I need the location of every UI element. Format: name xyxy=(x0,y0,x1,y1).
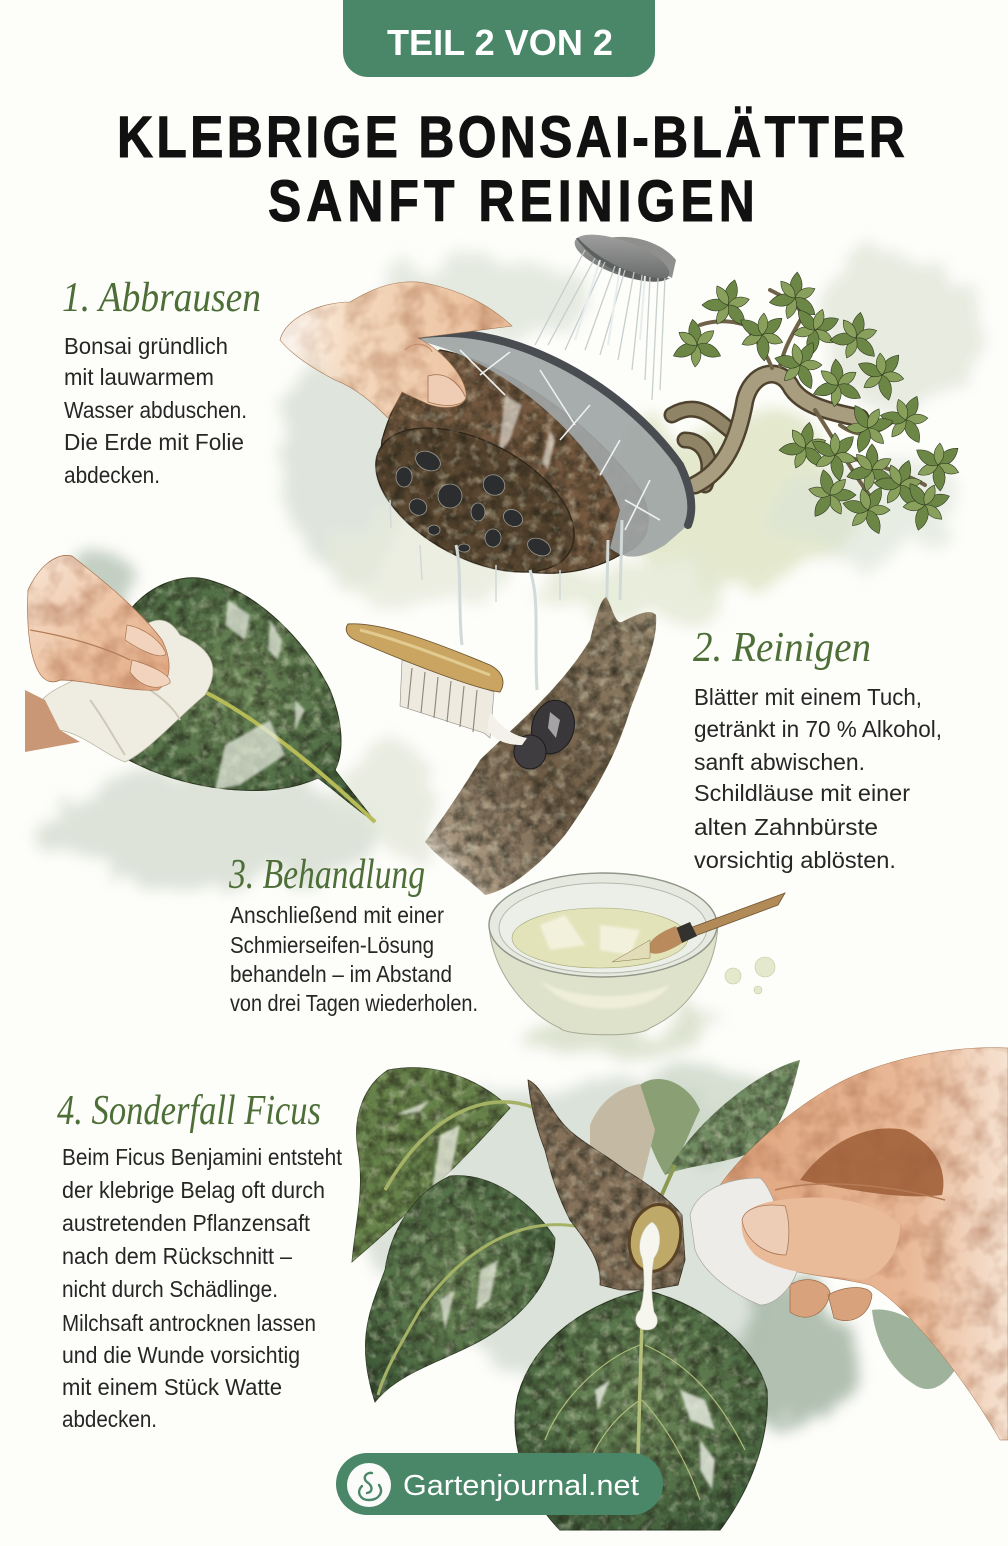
top tab: part label xyxy=(343,0,655,77)
bonsai tree xyxy=(671,266,974,544)
bark branch with cut xyxy=(528,1080,688,1290)
icon: sprout logo xyxy=(347,1463,391,1507)
text block: step 4: Beim Ficus Benjamini entsteht xyxy=(62,1144,343,1170)
heading: step 2: 2. Reinigen xyxy=(693,625,871,671)
text block: step 4: der klebrige Belag oft durch xyxy=(62,1177,325,1203)
cotton wad xyxy=(690,1178,797,1305)
terracotta pot with holes xyxy=(352,350,648,602)
plastic film over soil xyxy=(412,332,691,557)
text block: step 4 xyxy=(62,1144,343,1432)
text block: step 4: mit einem Stück Watte xyxy=(62,1374,282,1400)
footer badge: Gartenjournal.net xyxy=(336,1453,663,1515)
rear leaves xyxy=(640,1060,955,1389)
text block: step 4: nach dem Rückschnitt – xyxy=(62,1243,292,1269)
heading: step 3: 3. Behandlung xyxy=(228,852,425,898)
icon: shower head xyxy=(569,225,676,291)
water drips xyxy=(390,500,622,690)
panel: step 4 ficus illustration xyxy=(352,1048,1008,1530)
toothbrush xyxy=(346,624,527,745)
hand with cotton xyxy=(720,1048,1008,1440)
text block: step 1 xyxy=(64,333,247,488)
text block: step 3 xyxy=(230,902,478,1016)
text block: step 3: Schmierseifen-Lösung xyxy=(230,932,434,958)
paint brush xyxy=(612,893,785,962)
thumb pressing cotton xyxy=(742,1197,900,1280)
panel: step 1 shower illustration xyxy=(280,225,974,690)
text block: step 2: Blätter mit einem Tuch, xyxy=(694,684,922,710)
top tab: part label: TEIL 2 VON 2 xyxy=(387,22,613,63)
milky sap drop xyxy=(636,1222,660,1330)
panel: step 2 leaf wiping illustration xyxy=(25,555,375,822)
text block: step 3: Anschließend mit einer xyxy=(230,902,444,928)
glossy leaf xyxy=(90,578,375,822)
fingers wiping leaf xyxy=(25,555,170,752)
scale insects xyxy=(514,695,580,769)
text block: step 2: sanft abwischen. xyxy=(694,749,865,775)
heading: step 4: 4. Sonderfall Ficus xyxy=(57,1088,321,1134)
top left leaf xyxy=(352,1068,535,1262)
text block: step 1: Bonsai gründlich xyxy=(64,333,228,359)
text block: step 4: und die Wunde vorsichtig xyxy=(62,1342,300,1368)
text block: step 4: abdecken. xyxy=(62,1406,157,1432)
text block: step 2: vorsichtig ablösten. xyxy=(694,847,896,873)
soap droplets xyxy=(725,957,775,994)
text block: step 2: Schildläuse mit einer xyxy=(694,780,910,806)
glass bowl xyxy=(489,873,718,1035)
text block: step 1: Die Erde mit Folie xyxy=(64,429,244,455)
panel: watercolor background washes xyxy=(40,250,970,1435)
text block: step 1: Wasser abduschen. xyxy=(64,397,247,423)
text block: step 2: getränkt in 70 % Alkohol, xyxy=(694,716,942,742)
panel: branch with scale insects xyxy=(346,597,656,895)
text block: step 4: nicht durch Schädlinge. xyxy=(62,1276,278,1302)
text block: step 4: austretenden Pflanzensaft xyxy=(62,1210,311,1236)
text block: step 1: mit lauwarmem xyxy=(64,364,214,390)
title: SANFT REINIGEN xyxy=(268,170,755,234)
title: KLEBRIGE BONSAI-BLÄTTER xyxy=(117,106,905,170)
bottom large leaf xyxy=(515,1290,767,1530)
thumbnail xyxy=(742,1205,789,1255)
panel: step 3 bowl illustration xyxy=(489,873,785,1035)
bark branch xyxy=(425,597,656,895)
heading: step 1: 1. Abbrausen xyxy=(62,275,261,321)
water stream xyxy=(535,250,665,400)
hand holding the pot xyxy=(280,282,512,418)
text block: step 4: Milchsaft antrocknen lassen xyxy=(62,1310,316,1336)
middle left leaf xyxy=(365,1176,585,1402)
text block: step 3: von drei Tagen wiederholen. xyxy=(230,990,478,1016)
text block: step 2: alten Zahnbürste xyxy=(694,814,878,840)
text block: step 2 xyxy=(694,684,942,873)
text block: step 3: behandeln – im Abstand xyxy=(230,961,452,987)
cotton cloth xyxy=(41,620,213,762)
title xyxy=(117,106,905,234)
footer badge: Gartenjournal.net: Gartenjournal.net xyxy=(403,1470,639,1502)
text block: step 1: abdecken. xyxy=(64,462,160,488)
